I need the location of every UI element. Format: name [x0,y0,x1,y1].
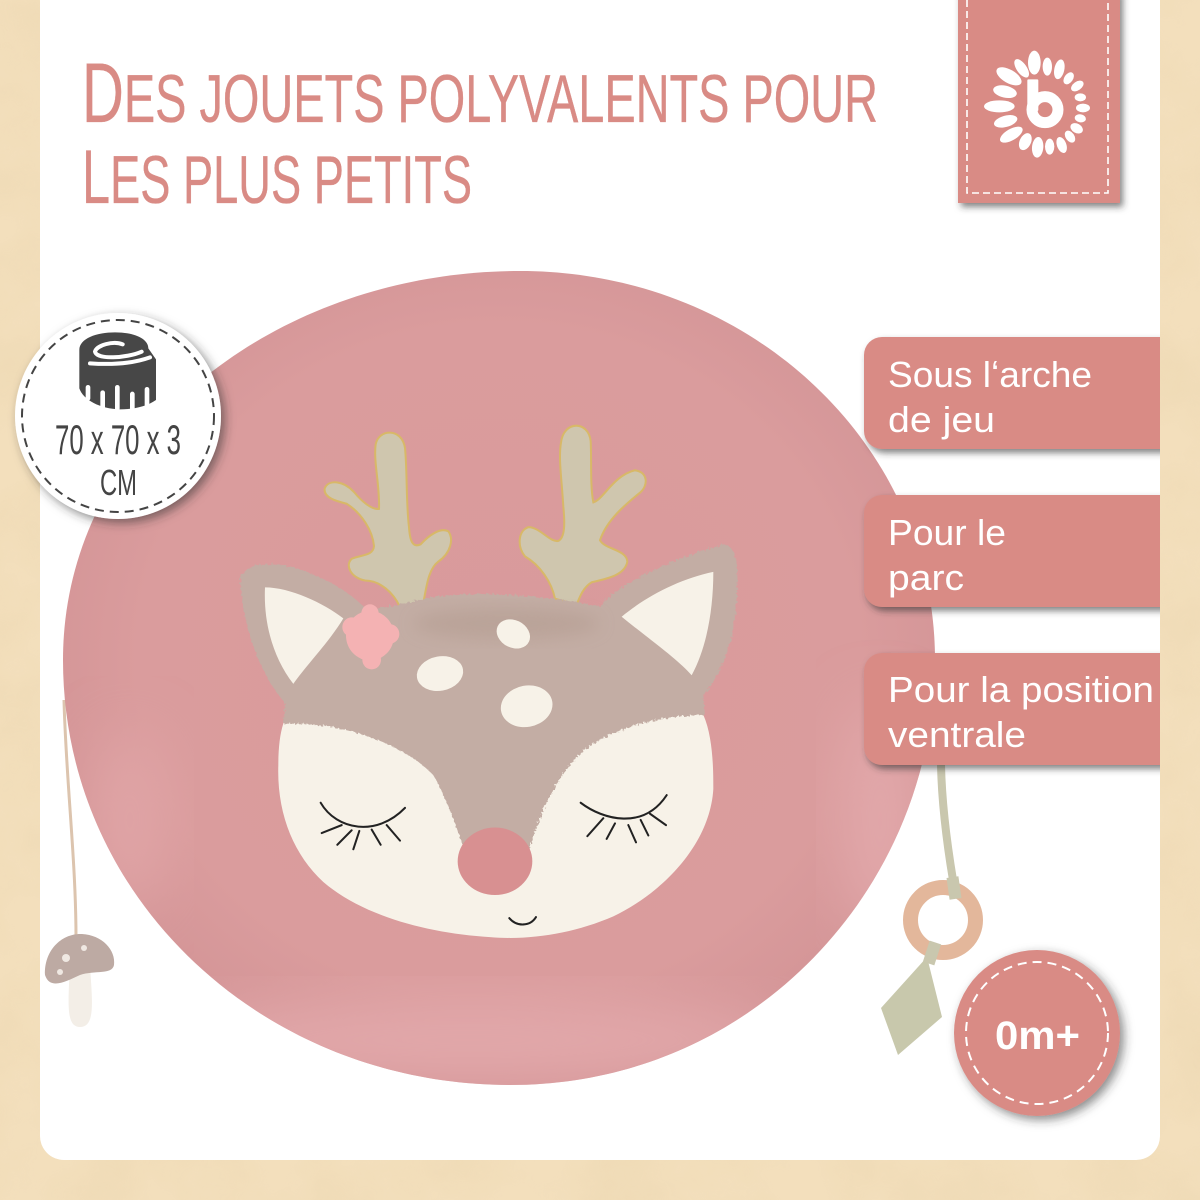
dimensions: 70 x 70 x 3 [55,416,181,463]
age badge: 0m+ [995,1014,1080,1058]
age badge [954,950,1120,1116]
hanging toy: mushroom on left cord [45,700,114,1027]
label: for the playpen: parc [888,557,964,598]
icon: rolled mat [79,332,156,409]
right inner ear [622,572,713,675]
size badge [15,313,221,519]
darker fur shading on crown [413,608,600,639]
deer face applique [240,426,737,938]
brand tag with logo [958,0,1120,203]
title: DES JOUETS POLYVALENTS POUR [82,46,878,140]
nose [458,828,532,895]
dimensions [55,416,181,503]
title [82,46,878,220]
closed eyes [321,795,667,924]
dimensions: CM [100,462,137,503]
labels column [864,337,1180,765]
left antler [325,433,451,607]
hanging toy: ring and leaf on right cord [881,765,976,1055]
round pink play mat [63,271,935,1085]
title: LES PLUS PETITS [82,135,472,220]
label: tummy time: ventrale [888,714,1026,755]
right antler [520,426,646,605]
label: under the arch [864,337,1180,449]
label: tummy time: Pour la position [888,669,1154,710]
label: under the arch: de jeu [888,399,995,440]
forehead spots [414,614,556,731]
fur head and ears [240,544,737,848]
pink flower [342,604,399,669]
cream muzzle [278,704,713,938]
label: for the playpen: Pour le [888,512,1006,553]
label: tummy time [864,653,1180,765]
label: under the arch: Sous lʻarche [888,354,1092,395]
label: for the playpen [864,495,1180,607]
mouth [509,917,536,924]
left inner ear [265,587,343,684]
icon: flower b logo [984,51,1090,158]
